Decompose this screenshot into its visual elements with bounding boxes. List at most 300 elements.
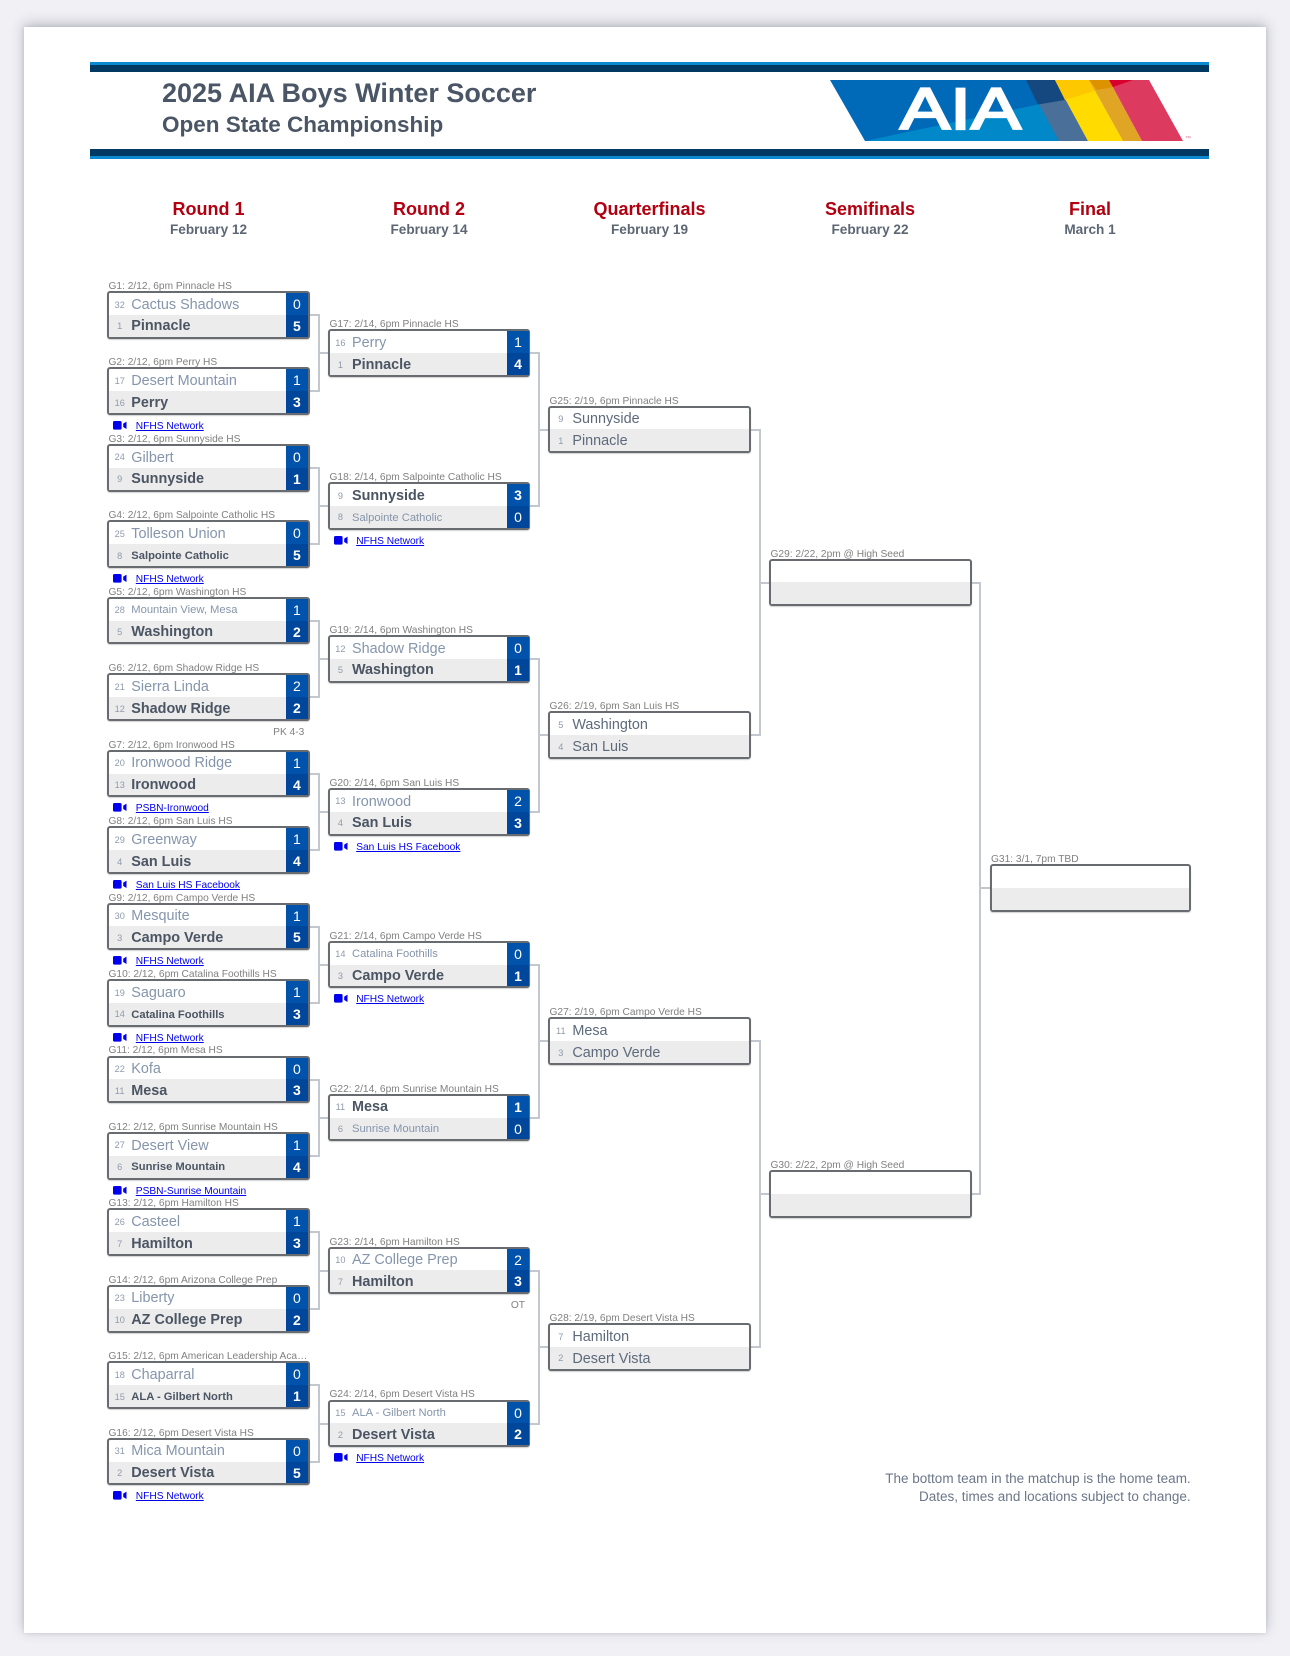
team: Desert View bbox=[115, 1134, 308, 1156]
team: San Luis: 4 bbox=[293, 853, 301, 869]
team: Shadow Ridge bbox=[335, 637, 529, 659]
G4 stream link: NFHS Network bbox=[136, 574, 204, 585]
G13 label: G13: 2/12, 6pm Hamilton HS bbox=[108, 1198, 239, 1209]
G7 matchup bbox=[107, 750, 310, 797]
team: Tolleson Union: 25 bbox=[115, 529, 125, 539]
G28 label: G28: 2/19, 6pm Desert Vista HS bbox=[550, 1313, 695, 1324]
G30 label: G30: 2/22, 2pm @ High Seed bbox=[770, 1160, 904, 1171]
team: Kofa: 22 bbox=[115, 1064, 125, 1074]
G27 label: G27: 2/19, 6pm Campo Verde HS bbox=[550, 1007, 702, 1018]
team: ALA - Gilbert North: ALA - Gilbert North bbox=[131, 1391, 233, 1403]
team: Cactus Shadows: 32 bbox=[115, 300, 125, 310]
team: Salpointe Catholic: 8 bbox=[117, 551, 122, 561]
team: AZ College Prep: 2 bbox=[293, 1312, 301, 1328]
team: Shadow Ridge: 2 bbox=[293, 700, 301, 716]
G1 label: G1: 2/12, 6pm Pinnacle HS bbox=[108, 281, 232, 292]
header bottom band bbox=[90, 149, 1208, 159]
team: ALA - Gilbert North: ALA - Gilbert North bbox=[352, 1407, 446, 1419]
G1 matchup bbox=[107, 291, 310, 339]
team: Casteel: 26 bbox=[115, 1217, 125, 1227]
team: Perry: 16 bbox=[335, 338, 346, 348]
G25 matchup bbox=[548, 406, 751, 453]
team: Perry: 1 bbox=[514, 334, 522, 350]
team: Mica Mountain bbox=[115, 1440, 308, 1462]
G8 label: G8: 2/12, 6pm San Luis HS bbox=[108, 816, 233, 827]
team: San Luis: 4 bbox=[558, 742, 563, 752]
G6 penalty kicks note: PK 4-3 bbox=[273, 727, 304, 738]
team: Desert Vista bbox=[330, 1423, 528, 1445]
team: Mesa: 1 bbox=[514, 1099, 522, 1115]
team: Salpointe Catholic: 0 bbox=[514, 509, 522, 525]
G8 stream link: San Luis HS Facebook bbox=[136, 880, 240, 891]
team: Mesquite bbox=[115, 905, 308, 926]
team: Mountain View, Mesa: 28 bbox=[115, 605, 125, 615]
G17 label: G17: 2/14, 6pm Pinnacle HS bbox=[330, 319, 459, 330]
team: Washington: 5 bbox=[558, 720, 563, 730]
G19 matchup bbox=[328, 635, 530, 683]
team: Greenway: Greenway bbox=[131, 832, 197, 848]
G24 matchup bbox=[328, 1400, 530, 1447]
heading: Round 1: February 12 bbox=[170, 222, 247, 237]
heading: Semifinals: Semifinals bbox=[825, 199, 915, 219]
team: Mountain View, Mesa: 1 bbox=[293, 602, 301, 618]
team: Salpointe Catholic bbox=[330, 506, 528, 528]
G29 empty matchup bbox=[769, 559, 972, 606]
G21 label: G21: 2/14, 6pm Campo Verde HS bbox=[330, 931, 482, 942]
G18 label: G18: 2/14, 6pm Salpointe Catholic HS bbox=[330, 472, 502, 483]
G18 stream link: NFHS Network bbox=[356, 536, 424, 547]
team: Hamilton: 3 bbox=[514, 1273, 522, 1289]
team: ALA - Gilbert North: 1 bbox=[293, 1388, 301, 1404]
team: Campo Verde bbox=[330, 965, 528, 986]
G9 label: G9: 2/12, 6pm Campo Verde HS bbox=[108, 893, 255, 904]
team: Desert Vista: 2 bbox=[514, 1426, 522, 1442]
team: AZ College Prep bbox=[109, 1309, 308, 1331]
heading: Round 2: Round 2 bbox=[393, 199, 465, 219]
team: Perry: Perry bbox=[352, 335, 386, 351]
team: Salpointe Catholic: Salpointe Catholic bbox=[352, 512, 442, 524]
team: AZ College Prep: 10 bbox=[115, 1315, 125, 1325]
G15 matchup bbox=[107, 1361, 310, 1409]
team: Desert Mountain bbox=[115, 369, 308, 391]
G26 matchup bbox=[548, 711, 751, 759]
team: Gilbert: 0 bbox=[293, 449, 301, 465]
team: Washington bbox=[330, 659, 528, 681]
team: Campo Verde: Campo Verde bbox=[131, 930, 223, 946]
team: Sunrise Mountain: 0 bbox=[514, 1121, 522, 1137]
heading: Semifinals: February 22 bbox=[831, 222, 909, 237]
team: Hamilton: 7 bbox=[338, 1277, 343, 1287]
heading: Final: March 1 bbox=[1064, 222, 1116, 237]
team: Campo Verde: Campo Verde bbox=[352, 968, 444, 984]
heading: Round 2: February 14 bbox=[390, 222, 468, 237]
team: Sierra Linda: Sierra Linda bbox=[131, 679, 209, 695]
team: Sunnyside: 9 bbox=[117, 474, 122, 484]
team: Campo Verde: 3 bbox=[117, 933, 122, 943]
team: Greenway: 1 bbox=[293, 831, 301, 847]
team: Pinnacle: 5 bbox=[293, 318, 301, 334]
team: Pinnacle: 1 bbox=[117, 321, 122, 331]
team: Mesa: 11 bbox=[336, 1102, 345, 1112]
AIA logo bbox=[830, 77, 1191, 142]
team: Desert Vista bbox=[109, 1462, 308, 1483]
team: Sierra Linda: 21 bbox=[115, 682, 125, 692]
team: Washington: 2 bbox=[293, 624, 301, 640]
G11 matchup bbox=[107, 1056, 310, 1103]
team: Saguaro bbox=[115, 981, 308, 1003]
team: Mesa: 11 bbox=[556, 1026, 566, 1036]
team: Campo Verde: 5 bbox=[293, 929, 301, 945]
team: Kofa: Kofa bbox=[131, 1061, 161, 1077]
G20 stream link: San Luis HS Facebook bbox=[356, 842, 460, 853]
team: Catalina Foothills: Catalina Foothills bbox=[131, 1008, 225, 1020]
team: San Luis: San Luis bbox=[352, 815, 412, 831]
header top band bbox=[90, 62, 1208, 72]
team: Sierra Linda bbox=[115, 675, 308, 697]
team: Ironwood Ridge: 1 bbox=[293, 755, 301, 771]
team: Salpointe Catholic: 8 bbox=[338, 512, 343, 522]
G5 matchup bbox=[107, 597, 310, 644]
heading: Quarterfinals: February 19 bbox=[611, 222, 688, 237]
team: Campo Verde: 3 bbox=[338, 971, 343, 981]
G9 matchup bbox=[107, 903, 310, 950]
G26 label: G26: 2/19, 6pm San Luis HS bbox=[550, 701, 679, 712]
team: Salpointe Catholic: 5 bbox=[293, 547, 301, 563]
team: Salpointe Catholic bbox=[109, 544, 308, 566]
team: Perry bbox=[109, 391, 308, 413]
team: Sunnyside: 3 bbox=[514, 487, 522, 503]
G17 matchup bbox=[328, 329, 530, 377]
team: Tolleson Union: Tolleson Union bbox=[131, 526, 226, 542]
team: ALA - Gilbert North bbox=[330, 1402, 528, 1423]
G14 label: G14: 2/12, 6pm Arizona College Prep bbox=[108, 1275, 277, 1286]
G16 stream link: NFHS Network bbox=[136, 1491, 204, 1502]
team: Mesa: 11 bbox=[115, 1086, 124, 1096]
team: Desert Vista: Desert Vista bbox=[352, 1427, 435, 1443]
team: San Luis: San Luis bbox=[572, 739, 628, 755]
G10 stream link: NFHS Network bbox=[136, 1033, 204, 1044]
G2 matchup bbox=[107, 367, 310, 415]
team: Catalina Foothills: 14 bbox=[115, 1009, 125, 1019]
team: Ironwood: 2 bbox=[514, 793, 522, 809]
team: Casteel: Casteel bbox=[131, 1214, 180, 1230]
G16 matchup bbox=[107, 1438, 310, 1485]
team: Sunrise Mountain: Sunrise Mountain bbox=[131, 1161, 225, 1173]
G20 matchup bbox=[328, 788, 530, 836]
G31 label: G31: 3/1, 7pm TBD bbox=[991, 854, 1079, 865]
team: Cactus Shadows: Cactus Shadows bbox=[131, 297, 239, 313]
team: Desert Mountain: Desert Mountain bbox=[131, 373, 237, 389]
G23 label: G23: 2/14, 6pm Hamilton HS bbox=[330, 1237, 460, 1248]
team: Mountain View, Mesa: Mountain View, Mesa bbox=[131, 604, 237, 616]
G3 matchup bbox=[107, 444, 310, 492]
team: Cactus Shadows bbox=[115, 293, 308, 315]
team: Liberty bbox=[115, 1287, 308, 1309]
team: Catalina Foothills: Catalina Foothills bbox=[352, 948, 438, 960]
team: Mesa: 3 bbox=[293, 1082, 301, 1098]
team: San Luis bbox=[109, 850, 308, 872]
G31 empty final matchup bbox=[990, 864, 1191, 912]
team: Chaparral: 18 bbox=[115, 1370, 125, 1380]
team: Casteel: 1 bbox=[293, 1213, 301, 1229]
team: Salpointe Catholic: Salpointe Catholic bbox=[131, 550, 229, 562]
team: Hamilton: Hamilton bbox=[352, 1274, 414, 1290]
team: Catalina Foothills: 0 bbox=[514, 946, 522, 962]
G24 stream link: NFHS Network bbox=[356, 1453, 424, 1464]
heading: Round 1 bbox=[170, 199, 247, 237]
team: Ironwood bbox=[109, 774, 308, 795]
team: ALA - Gilbert North: 15 bbox=[335, 1408, 346, 1418]
team: Ironwood bbox=[335, 790, 529, 812]
team: AZ College Prep: AZ College Prep bbox=[131, 1312, 242, 1328]
team: Shadow Ridge: 0 bbox=[514, 640, 522, 656]
heading: Quarterfinals: Quarterfinals bbox=[593, 199, 706, 219]
G2 stream link: NFHS Network bbox=[136, 421, 204, 432]
team: Desert Mountain: 17 bbox=[115, 376, 125, 386]
team: Desert Vista bbox=[550, 1347, 749, 1369]
team: Washington: Washington bbox=[572, 717, 648, 733]
G2 label: G2: 2/12, 6pm Perry HS bbox=[108, 357, 217, 368]
team: Shadow Ridge: 12 bbox=[335, 644, 346, 654]
team: Sunrise Mountain: Sunrise Mountain bbox=[352, 1123, 439, 1135]
G18 matchup bbox=[328, 482, 530, 530]
G28 matchup bbox=[548, 1323, 751, 1371]
team: Desert Vista: 2 bbox=[338, 1430, 343, 1440]
G12 label: G12: 2/12, 6pm Sunrise Mountain HS bbox=[108, 1122, 278, 1133]
team: Sunrise Mountain: 4 bbox=[293, 1159, 301, 1175]
G9 stream link: NFHS Network bbox=[136, 956, 204, 967]
G23 overtime note: OT bbox=[511, 1300, 525, 1311]
title: 2025 AIA Boys Winter Soccer bbox=[162, 78, 536, 108]
team: Hamilton: 7 bbox=[117, 1239, 122, 1249]
team: Liberty: Liberty bbox=[131, 1290, 174, 1306]
G29 label: G29: 2/22, 2pm @ High Seed bbox=[770, 549, 904, 560]
team: Ironwood: 4 bbox=[293, 777, 301, 793]
G11 label: G11: 2/12, 6pm Mesa HS bbox=[108, 1045, 223, 1056]
team: Desert Mountain: 1 bbox=[293, 372, 301, 388]
team: Sunrise Mountain: 6 bbox=[338, 1124, 343, 1134]
team: Mesa: Mesa bbox=[131, 1083, 167, 1099]
team: Hamilton bbox=[109, 1232, 308, 1254]
team: Mica Mountain: 0 bbox=[293, 1443, 301, 1459]
heading: Round 2 bbox=[390, 199, 468, 237]
G4 matchup bbox=[107, 520, 310, 568]
team: Shadow Ridge: 12 bbox=[115, 704, 125, 714]
team: Campo Verde: 3 bbox=[558, 1048, 563, 1058]
team: Ironwood: 13 bbox=[335, 796, 346, 806]
team: Sunnyside bbox=[550, 408, 749, 429]
team: Hamilton: Hamilton bbox=[131, 1236, 193, 1252]
team: Mica Mountain: 31 bbox=[115, 1446, 125, 1456]
team: Pinnacle: 1 bbox=[338, 360, 343, 370]
G22 label: G22: 2/14, 6pm Sunrise Mountain HS bbox=[330, 1084, 499, 1095]
G6 label: G6: 2/12, 6pm Shadow Ridge HS bbox=[108, 663, 259, 674]
team: Tolleson Union: 0 bbox=[293, 525, 301, 541]
team: Desert Vista: 2 bbox=[117, 1468, 122, 1478]
team: Greenway bbox=[115, 828, 308, 850]
team: Shadow Ridge bbox=[109, 697, 308, 719]
team: San Luis bbox=[330, 812, 528, 834]
G16 label: G16: 2/12, 6pm Desert Vista HS bbox=[108, 1428, 254, 1439]
G13 matchup bbox=[107, 1208, 310, 1256]
team: Shadow Ridge: Shadow Ridge bbox=[131, 701, 230, 717]
team: Desert Vista: Desert Vista bbox=[131, 1465, 214, 1481]
G22 matchup bbox=[328, 1094, 530, 1141]
team: Pinnacle: Pinnacle bbox=[572, 433, 628, 449]
team: Mesa bbox=[109, 1079, 308, 1101]
team: Ironwood Ridge bbox=[115, 752, 308, 774]
G21 stream link: NFHS Network bbox=[356, 994, 424, 1005]
heading: Round 1: Round 1 bbox=[172, 199, 244, 219]
team: Chaparral bbox=[115, 1363, 308, 1385]
team: Tolleson Union bbox=[115, 522, 308, 544]
team: Sunnyside bbox=[109, 468, 308, 490]
team: Pinnacle: Pinnacle bbox=[352, 357, 411, 373]
team: AZ College Prep bbox=[335, 1249, 529, 1270]
footnote: Dates, times and locations subject to change. bbox=[919, 1489, 1191, 1504]
team: Saguaro: 1 bbox=[293, 984, 301, 1000]
team: San Luis bbox=[550, 735, 749, 757]
G4 label: G4: 2/12, 6pm Salpointe Catholic HS bbox=[108, 510, 275, 521]
team: Hamilton: 3 bbox=[293, 1235, 301, 1251]
team: Perry: 3 bbox=[293, 394, 301, 410]
team: Saguaro: Saguaro bbox=[131, 985, 186, 1001]
team: Mesa bbox=[550, 1019, 749, 1041]
team: Campo Verde bbox=[109, 926, 308, 948]
team: Gilbert: 24 bbox=[115, 452, 125, 462]
team: ALA - Gilbert North: 15 bbox=[115, 1392, 125, 1402]
team: Sunrise Mountain: 6 bbox=[117, 1162, 122, 1172]
team: Sunnyside: Sunnyside bbox=[352, 488, 425, 504]
G10 matchup bbox=[107, 979, 310, 1027]
team: Greenway: 29 bbox=[115, 835, 125, 845]
G25 label: G25: 2/19, 6pm Pinnacle HS bbox=[550, 396, 679, 407]
team: Desert Vista: Desert Vista bbox=[572, 1350, 650, 1366]
team: Pinnacle bbox=[109, 315, 308, 337]
team: Ironwood: 13 bbox=[115, 780, 125, 790]
heading: Quarterfinals bbox=[593, 199, 706, 237]
team: Ironwood Ridge: Ironwood Ridge bbox=[131, 755, 232, 771]
team: San Luis: 4 bbox=[117, 856, 122, 866]
team: Washington: 5 bbox=[338, 665, 343, 675]
team: Desert View: 27 bbox=[115, 1140, 125, 1150]
team: Mesquite: Mesquite bbox=[131, 908, 190, 924]
team: Pinnacle: 4 bbox=[514, 356, 522, 372]
team: Desert Vista: 2 bbox=[558, 1353, 563, 1363]
team: AZ College Prep: AZ College Prep bbox=[352, 1252, 458, 1268]
team: Kofa bbox=[115, 1058, 308, 1079]
team: AZ College Prep: 2 bbox=[514, 1252, 522, 1268]
team: Mica Mountain: Mica Mountain bbox=[131, 1443, 225, 1459]
team: Kofa: 0 bbox=[293, 1060, 301, 1076]
G20 label: G20: 2/14, 6pm San Luis HS bbox=[330, 778, 459, 789]
team: Sunrise Mountain bbox=[330, 1118, 528, 1139]
G5 label: G5: 2/12, 6pm Washington HS bbox=[108, 587, 246, 598]
team: Hamilton bbox=[330, 1270, 528, 1292]
team: Chaparral: 0 bbox=[293, 1366, 301, 1382]
G6 matchup bbox=[107, 673, 310, 721]
team: Perry: 16 bbox=[115, 398, 125, 408]
team: Hamilton: 7 bbox=[558, 1332, 563, 1342]
team: Desert View: 1 bbox=[293, 1137, 301, 1153]
team: Liberty: 23 bbox=[115, 1293, 125, 1303]
AIA logo: AIA bbox=[900, 77, 1021, 142]
team: Desert Vista: 5 bbox=[293, 1465, 301, 1481]
team: Chaparral: Chaparral bbox=[131, 1367, 194, 1383]
AIA logo: ™ bbox=[1185, 135, 1191, 142]
team: Mesa: Mesa bbox=[572, 1023, 608, 1039]
G10 label: G10: 2/12, 6pm Catalina Foothills HS bbox=[108, 969, 277, 980]
team: Pinnacle: Pinnacle bbox=[131, 318, 190, 334]
team: Desert View: Desert View bbox=[131, 1138, 209, 1154]
G23 matchup bbox=[328, 1247, 530, 1294]
team: Washington: 5 bbox=[117, 627, 122, 637]
team: Ironwood: Ironwood bbox=[131, 777, 196, 793]
team: San Luis: 4 bbox=[338, 818, 343, 828]
team: Saguaro: 19 bbox=[115, 988, 125, 998]
team: Cactus Shadows: 0 bbox=[293, 296, 301, 312]
team: Catalina Foothills: 3 bbox=[293, 1006, 301, 1022]
G12 matchup bbox=[107, 1132, 310, 1180]
team: Ironwood Ridge: 20 bbox=[115, 758, 125, 768]
team: Catalina Foothills: 14 bbox=[335, 949, 346, 959]
team: Sunrise Mountain bbox=[109, 1156, 308, 1178]
team: Shadow Ridge: Shadow Ridge bbox=[352, 641, 446, 657]
team: Campo Verde: Campo Verde bbox=[572, 1045, 660, 1061]
team: Mesquite: 1 bbox=[293, 908, 301, 924]
footnote bbox=[860, 1470, 1191, 1506]
footnote: The bottom team in the matchup is the home team. bbox=[885, 1471, 1191, 1486]
team: Mesquite: 30 bbox=[115, 911, 125, 921]
G24 stream link bbox=[334, 1451, 504, 1466]
G21 matchup bbox=[328, 941, 530, 988]
team: Casteel bbox=[115, 1210, 308, 1232]
team: Mountain View, Mesa bbox=[115, 599, 308, 621]
G27 matchup bbox=[548, 1017, 751, 1065]
team: Washington: 1 bbox=[514, 662, 522, 678]
team: San Luis: San Luis bbox=[131, 854, 191, 870]
G14 matchup bbox=[107, 1285, 310, 1333]
heading: Final bbox=[1064, 199, 1116, 237]
team: Liberty: 0 bbox=[293, 1290, 301, 1306]
team: Perry: Perry bbox=[131, 395, 168, 411]
team: Hamilton bbox=[550, 1325, 749, 1347]
team: Washington: Washington bbox=[352, 662, 434, 678]
team: Pinnacle bbox=[550, 429, 749, 451]
team: AZ College Prep: 10 bbox=[335, 1255, 346, 1265]
team: Campo Verde bbox=[550, 1041, 749, 1063]
team: Sunnyside: Sunnyside bbox=[131, 471, 204, 487]
G7 stream link: PSBN-Ironwood bbox=[136, 803, 209, 814]
G8 matchup bbox=[107, 826, 310, 874]
subtitle: Open State Championship bbox=[162, 112, 443, 137]
G19 label: G19: 2/14, 6pm Washington HS bbox=[330, 625, 473, 636]
team: Ironwood: Ironwood bbox=[352, 794, 411, 810]
team: Catalina Foothills bbox=[335, 943, 529, 965]
team: Gilbert bbox=[115, 446, 308, 468]
team: Sunnyside: Sunnyside bbox=[572, 411, 640, 427]
team: Sunnyside: 9 bbox=[338, 491, 343, 501]
team: Hamilton: Hamilton bbox=[572, 1329, 629, 1345]
heading: Semifinals bbox=[825, 199, 915, 237]
team: Catalina Foothills bbox=[109, 1003, 308, 1025]
team: Campo Verde: 1 bbox=[514, 968, 522, 984]
team: Gilbert: Gilbert bbox=[131, 450, 174, 466]
G15 label: G15: 2/12, 6pm American Leadership Aca… bbox=[108, 1351, 307, 1362]
team: ALA - Gilbert North: 0 bbox=[514, 1404, 522, 1420]
team: Washington bbox=[109, 621, 308, 642]
G12 stream link: PSBN-Sunrise Mountain bbox=[136, 1186, 246, 1197]
